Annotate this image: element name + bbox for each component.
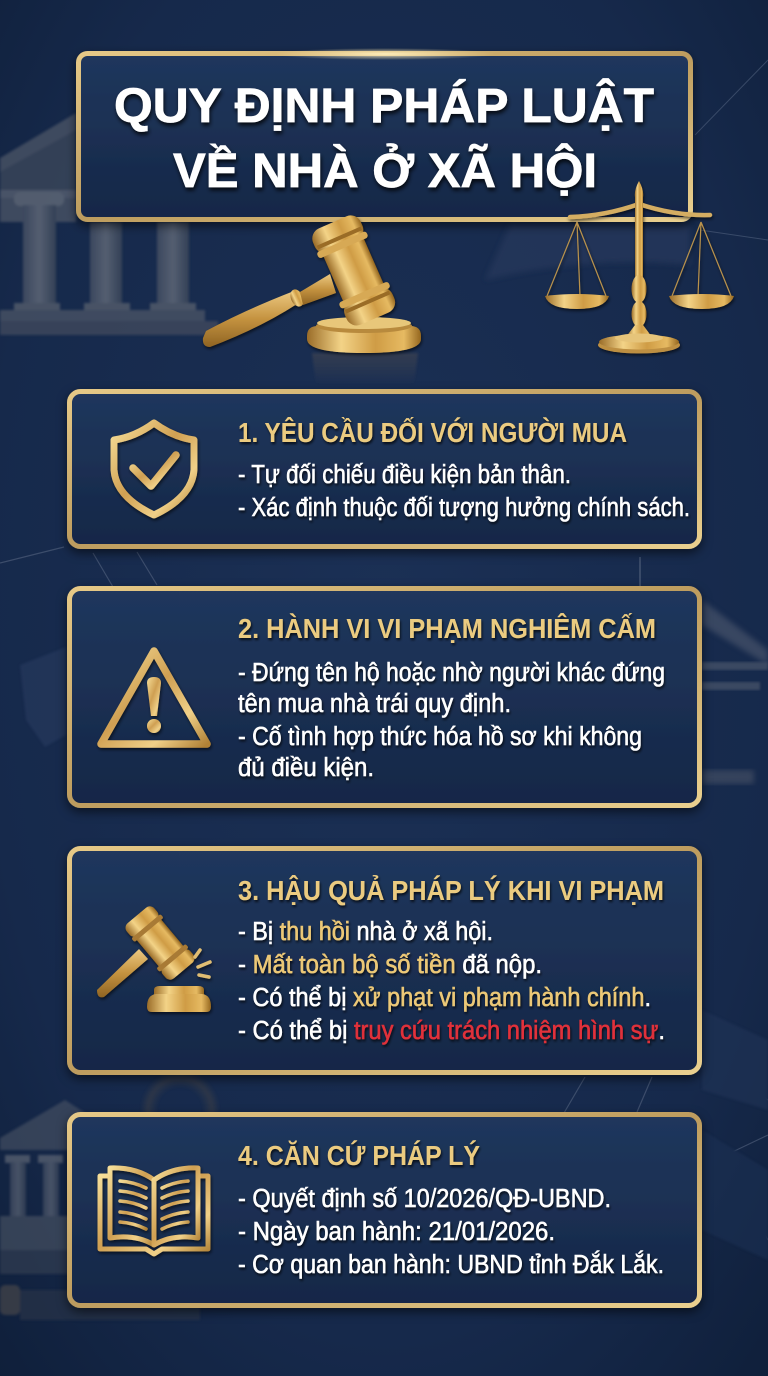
icon: golden scales	[545, 181, 734, 354]
heading: card 2: 2. HÀNH VI VI PHẠM NGHIÊM CẤM	[238, 613, 656, 644]
glow on title frame	[275, 48, 495, 60]
text block: card 4: - Ngày ban hành: 21/01/2026.	[238, 1218, 555, 1246]
text block: card 3: - Mất toàn bộ số tiền đã nộp.	[238, 951, 542, 979]
icon: golden gavel	[203, 212, 421, 353]
text block: card 3	[238, 918, 665, 1045]
icon: warning triangle	[101, 651, 207, 744]
background: lower temple	[0, 1070, 220, 1320]
text block: card 4: - Quyết định số 10/2026/QĐ-UBND.	[238, 1185, 611, 1213]
background: faded geometric lines top right	[695, 60, 768, 240]
text block: card 1: - Tự đối chiếu điều kiện bản thân.	[238, 461, 571, 489]
text block: card 3: - Có thể bị truy cứu trách nhiệm hình sự.	[238, 1017, 665, 1045]
text block: card 2: - Đứng tên hộ hoặc nhờ người khác đứng	[238, 659, 665, 687]
panel: card 2	[70, 588, 700, 806]
background: upper temple	[0, 113, 218, 335]
text block: card 4	[238, 1185, 664, 1279]
panel: card 3	[70, 848, 700, 1072]
title	[114, 78, 654, 198]
panel: card 1	[70, 392, 700, 546]
text block: card 4: - Cơ quan ban hành: UBND tỉnh Đắk Lắk.	[238, 1250, 664, 1279]
title: QUY ĐỊNH PHÁP LUẬT	[114, 78, 654, 133]
icon: small gavel	[97, 903, 211, 1012]
text block: card 3: - Có thể bị xử phạt vi phạm hành chính.	[238, 984, 651, 1012]
text block: card 3: - Bị thu hồi nhà ở xã hội.	[238, 918, 493, 946]
text block: card 1	[238, 461, 690, 522]
text block: card 2: tên mua nhà trái quy định.	[238, 690, 511, 718]
title panel	[78, 54, 690, 220]
text block: card 2	[238, 659, 665, 782]
heading: card 3: 3. HẬU QUẢ PHÁP LÝ KHI VI PHẠM	[238, 874, 664, 906]
heading: card 1: 1. YÊU CẦU ĐỐI VỚI NGƯỜI MUA	[238, 416, 627, 448]
background: faded side shapes	[0, 547, 768, 1260]
panel: card 4	[70, 1114, 700, 1306]
title: VỀ NHÀ Ở XÃ HỘI	[173, 143, 597, 198]
text block: card 1: - Xác định thuộc đối tượng hưởng chính sách.	[238, 494, 690, 522]
gavel reflection	[312, 353, 418, 385]
background: faded law book	[485, 225, 690, 280]
text block: card 2: - Cố tình hợp thức hóa hồ sơ khi không	[238, 723, 642, 751]
heading: card 4: 4. CĂN CỨ PHÁP LÝ	[238, 1140, 480, 1171]
icon: shield with check	[114, 423, 194, 515]
icon: open book	[100, 1168, 208, 1254]
text block: card 2: đủ điều kiện.	[238, 754, 374, 782]
